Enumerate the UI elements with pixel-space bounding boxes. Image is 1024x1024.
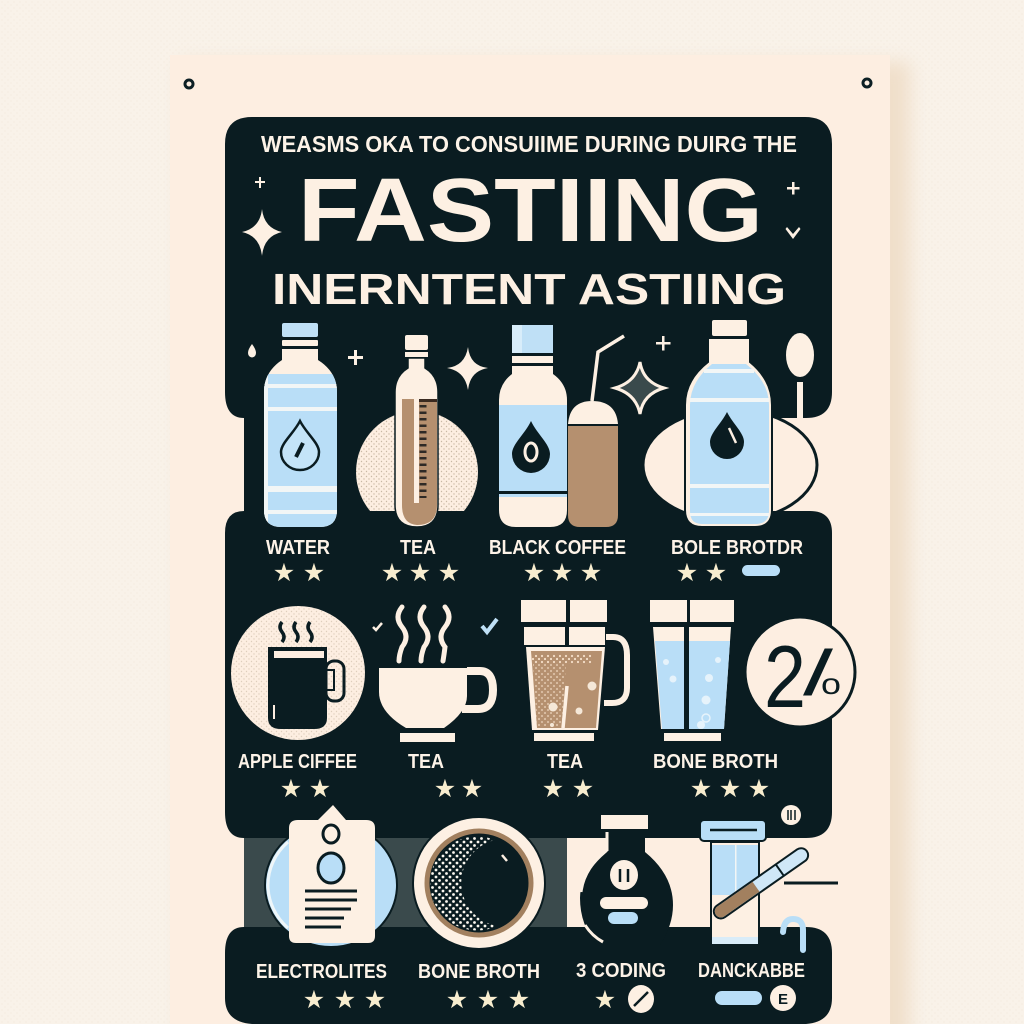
row 1 labels: WATER — [266, 537, 331, 559]
row 1 ratings: ★ — [551, 558, 573, 587]
poster sheet — [170, 55, 890, 1024]
row 3 ratings: ★ — [303, 985, 325, 1014]
row 3 ratings: ★ — [446, 985, 468, 1014]
row 1 labels — [266, 537, 803, 559]
poster shadow — [180, 62, 910, 1024]
icon: bone broth bowl — [413, 817, 545, 949]
row 2 labels: BONE BROTH — [653, 751, 778, 773]
icon: water bottle with coffee cup and straw — [499, 325, 624, 527]
row 1 ratings: ★ — [523, 558, 545, 587]
pin left — [185, 80, 193, 88]
row 2 ratings — [280, 774, 770, 803]
icon: latte glass — [521, 600, 627, 741]
row 3 labels: DANCKABBE — [698, 960, 805, 982]
row 1 ratings: ★ — [676, 558, 698, 587]
row 2 ratings: ★ — [461, 774, 483, 803]
grey band behind row 3 — [244, 838, 567, 927]
row 3 ratings: ★ — [364, 985, 386, 1014]
row 1 ratings: ★ — [705, 558, 727, 587]
icon: percent badge: 2 — [764, 627, 806, 726]
icon: tea cup with steam — [373, 607, 497, 742]
row 1 ratings: ★ — [409, 558, 431, 587]
pin right — [863, 79, 871, 87]
row 2 ratings: ★ — [280, 774, 302, 803]
subtitle line: WEASMS OKA TO CONSUIIME DURING DUIRG THE — [261, 131, 797, 157]
row 3 ratings — [303, 985, 796, 1014]
row 3 labels: BONE BROTH — [418, 961, 540, 983]
dark panel — [225, 117, 832, 1024]
row 3 labels: ELECTROLITES — [256, 961, 387, 983]
row 2 labels: TEA — [408, 751, 444, 773]
row 3 ratings: E — [778, 991, 788, 1008]
icon: water bottle — [262, 323, 340, 529]
row 3 ratings: ★ — [508, 985, 530, 1014]
row 2 ratings: ★ — [748, 774, 770, 803]
row 1 ratings: ★ — [303, 558, 325, 587]
row 1 ratings: ★ — [580, 558, 602, 587]
row 2 labels — [238, 751, 778, 773]
row 2 ratings: ★ — [690, 774, 712, 803]
row 2 ratings: ★ — [309, 774, 331, 803]
icon: sparkling water glass — [650, 600, 734, 741]
icon: electrolytes tag — [265, 805, 397, 947]
main title: FASTIING — [298, 161, 763, 261]
row 1 ratings: ★ — [381, 558, 403, 587]
icon: percent badge: / — [803, 637, 833, 709]
icon: large bottle with circle and spoon — [643, 320, 817, 527]
row 1 labels: BOLE BROTDR — [671, 537, 803, 559]
row 1 small sparkles — [248, 336, 670, 414]
row 2 labels: APPLE CIFFEE — [238, 751, 357, 773]
row 3 ratings: ★ — [477, 985, 499, 1014]
icon: test tube with stick — [700, 805, 838, 950]
row 2 ratings: ★ — [572, 774, 594, 803]
row 3 labels — [256, 960, 805, 983]
row 1 labels: BLACK COFFEE — [489, 537, 626, 559]
icon: percent badge: o — [821, 668, 841, 701]
row 2 ratings: ★ — [542, 774, 564, 803]
row 1 labels: TEA — [400, 537, 436, 559]
row 2 ratings: ★ — [719, 774, 741, 803]
icon: tea tube with dotted circle — [356, 335, 478, 533]
row 3 ratings: ★ — [334, 985, 356, 1014]
row 1 ratings — [273, 558, 780, 587]
icon: percent badge — [745, 617, 855, 727]
icon: mug in dotted circle — [231, 606, 365, 740]
row 3 ratings: ★ — [594, 985, 616, 1014]
row 3 labels: 3 CODING — [576, 960, 666, 982]
header sparkles — [242, 177, 800, 256]
row 2 labels: TEA — [547, 751, 583, 773]
row 2 ratings: ★ — [434, 774, 456, 803]
icon: flask — [580, 815, 673, 945]
secondary title: INERNTENT ASTIING — [272, 265, 786, 314]
row 1 ratings: ★ — [438, 558, 460, 587]
row 1 ratings: ★ — [273, 558, 295, 587]
